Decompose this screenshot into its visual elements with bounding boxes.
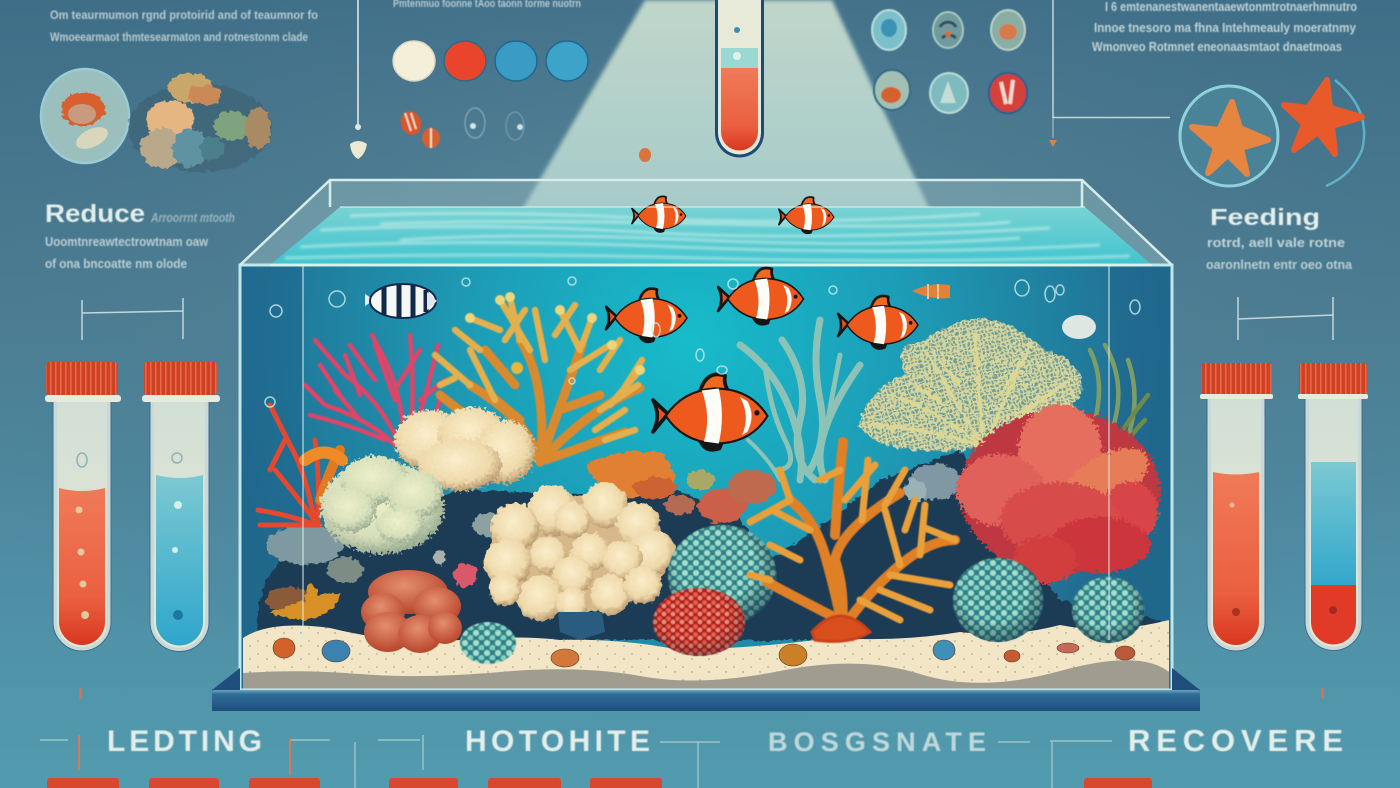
top test tube: [715, 0, 764, 158]
feeding text block: [1206, 204, 1353, 272]
reduce text block: Reduce: [45, 200, 145, 228]
top right text block: Wmonveo Rotmnet eneonaasmtaot dnaetmoas: [1092, 39, 1342, 54]
water surface: [270, 207, 1152, 265]
small marker: [1049, 140, 1057, 147]
striped fish: [365, 284, 437, 318]
icon: lens with coral specimen: [41, 69, 129, 163]
pale green coral: [320, 456, 444, 554]
clownfish right: [838, 296, 918, 350]
clownfish large: [653, 374, 768, 452]
sand floor: [243, 620, 1169, 690]
reduce text block: Uoomtnreawtectrowtnam oaw: [45, 234, 209, 249]
reef cluster illustration: [128, 73, 272, 172]
clownfish middle: [718, 268, 804, 326]
clownfish at surface left: [632, 196, 686, 233]
orange mid coral: [586, 451, 776, 523]
red bushy coral: [956, 404, 1160, 584]
top left text block: Wmoeearmaot thmtesearmaton and rotnestonm clade: [50, 30, 308, 44]
teal round coral far right: [1072, 577, 1144, 643]
bubbles: [265, 277, 1140, 407]
starfish with arc: [1284, 80, 1364, 186]
tank back wall: [240, 180, 1172, 265]
pale shell floating: [1062, 315, 1096, 339]
bottom label: recovere: RECOVERE: [1128, 723, 1343, 758]
reduce text block: [45, 200, 235, 271]
aquarium: [212, 180, 1200, 711]
small teal coral on sand: [460, 622, 516, 664]
cream coral top: [394, 407, 535, 491]
small icon medallions: [872, 10, 1027, 113]
left test tube red: [45, 362, 121, 651]
seaweed centre: [740, 320, 860, 480]
brain coral: [361, 570, 462, 653]
blue base under cauliflower coral: [558, 612, 605, 640]
teal round coral right: [953, 558, 1043, 642]
right bracket corner line: [1053, 0, 1170, 138]
reduce text block: of ona bncoatte nm olode: [45, 256, 187, 271]
golden branch coral: [435, 292, 645, 462]
small yellow coral: [266, 584, 341, 620]
top left text block: [50, 8, 318, 44]
glass frame: [240, 180, 1172, 690]
colour swatches: [393, 41, 588, 81]
bottom label: ledting: [40, 725, 330, 775]
pebbles: [273, 638, 1135, 667]
seaweed right: [1090, 345, 1148, 470]
tiny falling food fleck: [639, 148, 651, 162]
top right text block: Innoe tnesoro ma fhna Intehmeauly moeratnmy: [1094, 20, 1357, 35]
right test tube blue and red: [1298, 363, 1368, 650]
teal round coral centre: [668, 525, 776, 625]
feeding text block: rotrd, aell vale rotne: [1207, 235, 1345, 250]
red fan coral: [305, 335, 445, 445]
top left text block: Om teaurmumon rgnd protoirid and of teaumnor fo: [50, 8, 318, 22]
clownfish at surface right: [779, 197, 834, 234]
bottom label: hotohite: [355, 725, 720, 788]
water body: [240, 265, 1172, 690]
orange branch coral: [750, 442, 955, 641]
feeding text block: Feeding: [1210, 204, 1320, 230]
beige fan coral: [858, 318, 1083, 451]
small orange fish: [912, 284, 950, 299]
red orange branch coral: [258, 405, 342, 525]
side panels: [242, 267, 1170, 637]
left test tube blue: [142, 362, 220, 652]
cream cauliflower coral: [484, 482, 675, 621]
light beam: [522, 0, 930, 210]
bottom label: hotohite: HOTOHITE: [465, 725, 650, 758]
clownfish left: [606, 289, 687, 343]
pendant line and drop: [350, 0, 367, 159]
left bracket: [82, 298, 183, 340]
reduce text block: Arroorrnt mtooth: [150, 210, 235, 225]
bottom label: diagnostic: BOSGSNATE: [768, 727, 986, 757]
small fish and bubbles under swatches: [397, 108, 524, 148]
bottom label: diagnostic: [768, 727, 1112, 788]
starfish in lens: [1180, 86, 1278, 186]
tiny markers: [79, 688, 1324, 699]
tank base: [212, 668, 1200, 711]
feeding text block: oaronlnetn entr oeo otna: [1206, 257, 1353, 272]
right test tube red: [1200, 363, 1273, 651]
top right text block: [1092, 0, 1357, 54]
rock backdrop: [258, 450, 1160, 640]
red round coral: [653, 588, 745, 656]
right bracket: [1238, 297, 1333, 340]
bottom row of tube caps: [47, 778, 1152, 788]
bottom label: ledting: LEDTING: [107, 725, 262, 758]
